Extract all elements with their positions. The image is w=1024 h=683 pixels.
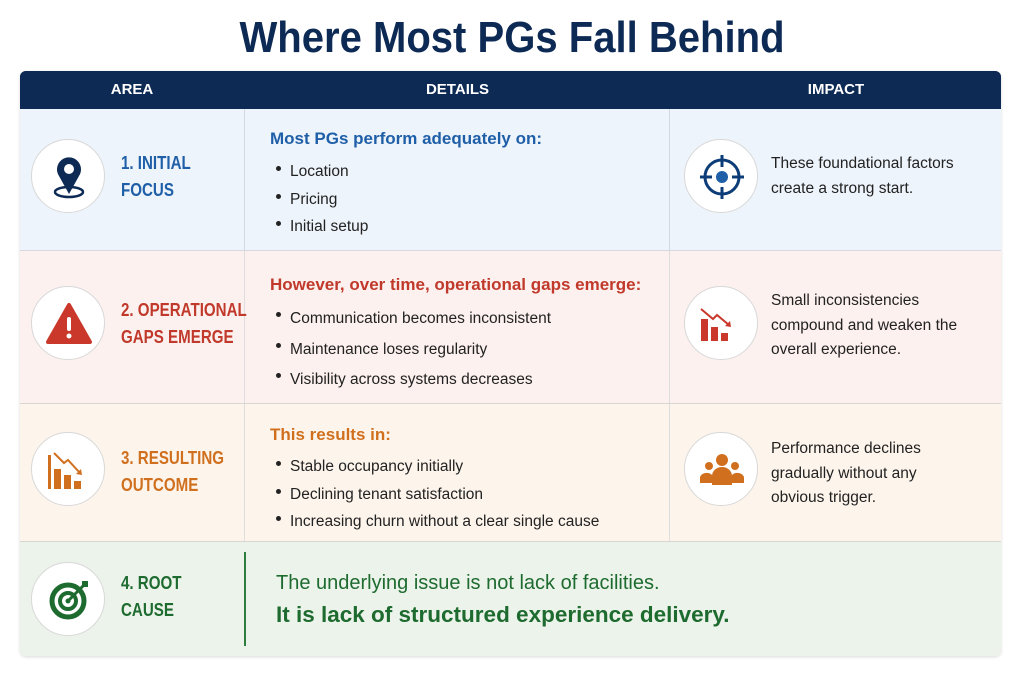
icon: crosshair (684, 139, 758, 213)
details: row 1: Most PGs perform adequately on: (270, 129, 542, 148)
label: resulting outcome: 3. RESULTING (121, 448, 224, 468)
details: row 1: Pricing (290, 190, 337, 208)
details: row 3: Stable occupancy initially (290, 458, 463, 475)
impact: row 1: These foundational factors (771, 155, 954, 172)
row 4 (20, 542, 1001, 656)
root cause statement (276, 572, 730, 627)
root cause statement: The underlying issue is not lack of facilities. (276, 572, 660, 594)
details: row 2 (270, 275, 641, 388)
label: operational gaps: 2. OPERATIONAL (121, 300, 247, 320)
label: root cause: 4. ROOT (121, 573, 181, 593)
impact: row 2: overall experience. (771, 341, 901, 358)
details: row 3: Increasing churn without a clear single cause (290, 513, 599, 530)
details: row 2: Visibility across systems decreases (290, 371, 533, 388)
label: root cause (121, 573, 182, 620)
row 3 (20, 404, 1001, 542)
row 2 (20, 251, 1001, 404)
impact: row 3: Performance declines (771, 440, 921, 457)
details: row 2: However, over time, operational gaps emerge: (270, 275, 641, 294)
details: row 2: Maintenance loses regularity (290, 340, 487, 358)
details: row 3: This results in: (270, 425, 391, 444)
icon: warning (31, 286, 105, 360)
header: impact (671, 71, 1001, 109)
impact: row 1 (771, 155, 954, 196)
icon: target arrow (31, 562, 105, 636)
details: row 1: Location (290, 163, 349, 180)
label: resulting outcome (121, 448, 224, 495)
label: resulting outcome: OUTCOME (121, 475, 198, 495)
icon: declining chart orange (31, 432, 105, 506)
row 1 (20, 109, 1001, 251)
label: initial focus: 1. INITIAL (121, 153, 191, 173)
impact: row 2 (771, 292, 957, 358)
icon: declining chart red (684, 286, 758, 360)
details: row 1 (270, 129, 542, 235)
impact: row 3: obvious trigger. (771, 489, 876, 506)
label: initial focus (121, 153, 191, 200)
label: operational gaps (121, 300, 247, 347)
label: root cause: CAUSE (121, 600, 174, 620)
impact: row 1: create a strong start. (771, 180, 913, 196)
details: row 1: Initial setup (290, 218, 368, 235)
header: impact: IMPACT (808, 81, 864, 98)
title: Where Most PGs Fall Behind (239, 13, 785, 62)
label: operational gaps: GAPS EMERGE (121, 327, 234, 347)
label: initial focus: FOCUS (121, 180, 174, 200)
root cause statement: It is lack of structured experience delivery. (276, 602, 730, 627)
impact: row 3 (771, 440, 921, 506)
header: area: AREA (111, 81, 153, 98)
details: row 3: Declining tenant satisfaction (290, 486, 483, 502)
header: details (246, 71, 669, 109)
impact: row 3: gradually without any (771, 464, 917, 482)
header: details: DETAILS (426, 81, 489, 98)
icon: people (684, 432, 758, 506)
impact: row 2: Small inconsistencies (771, 292, 919, 309)
header row (20, 71, 1001, 109)
header: area (20, 71, 244, 109)
details: row 2: Communication becomes inconsistent (290, 310, 551, 327)
details: row 3 (270, 425, 599, 530)
icon: location pin (31, 139, 105, 213)
impact: row 2: compound and weaken the (771, 316, 957, 334)
